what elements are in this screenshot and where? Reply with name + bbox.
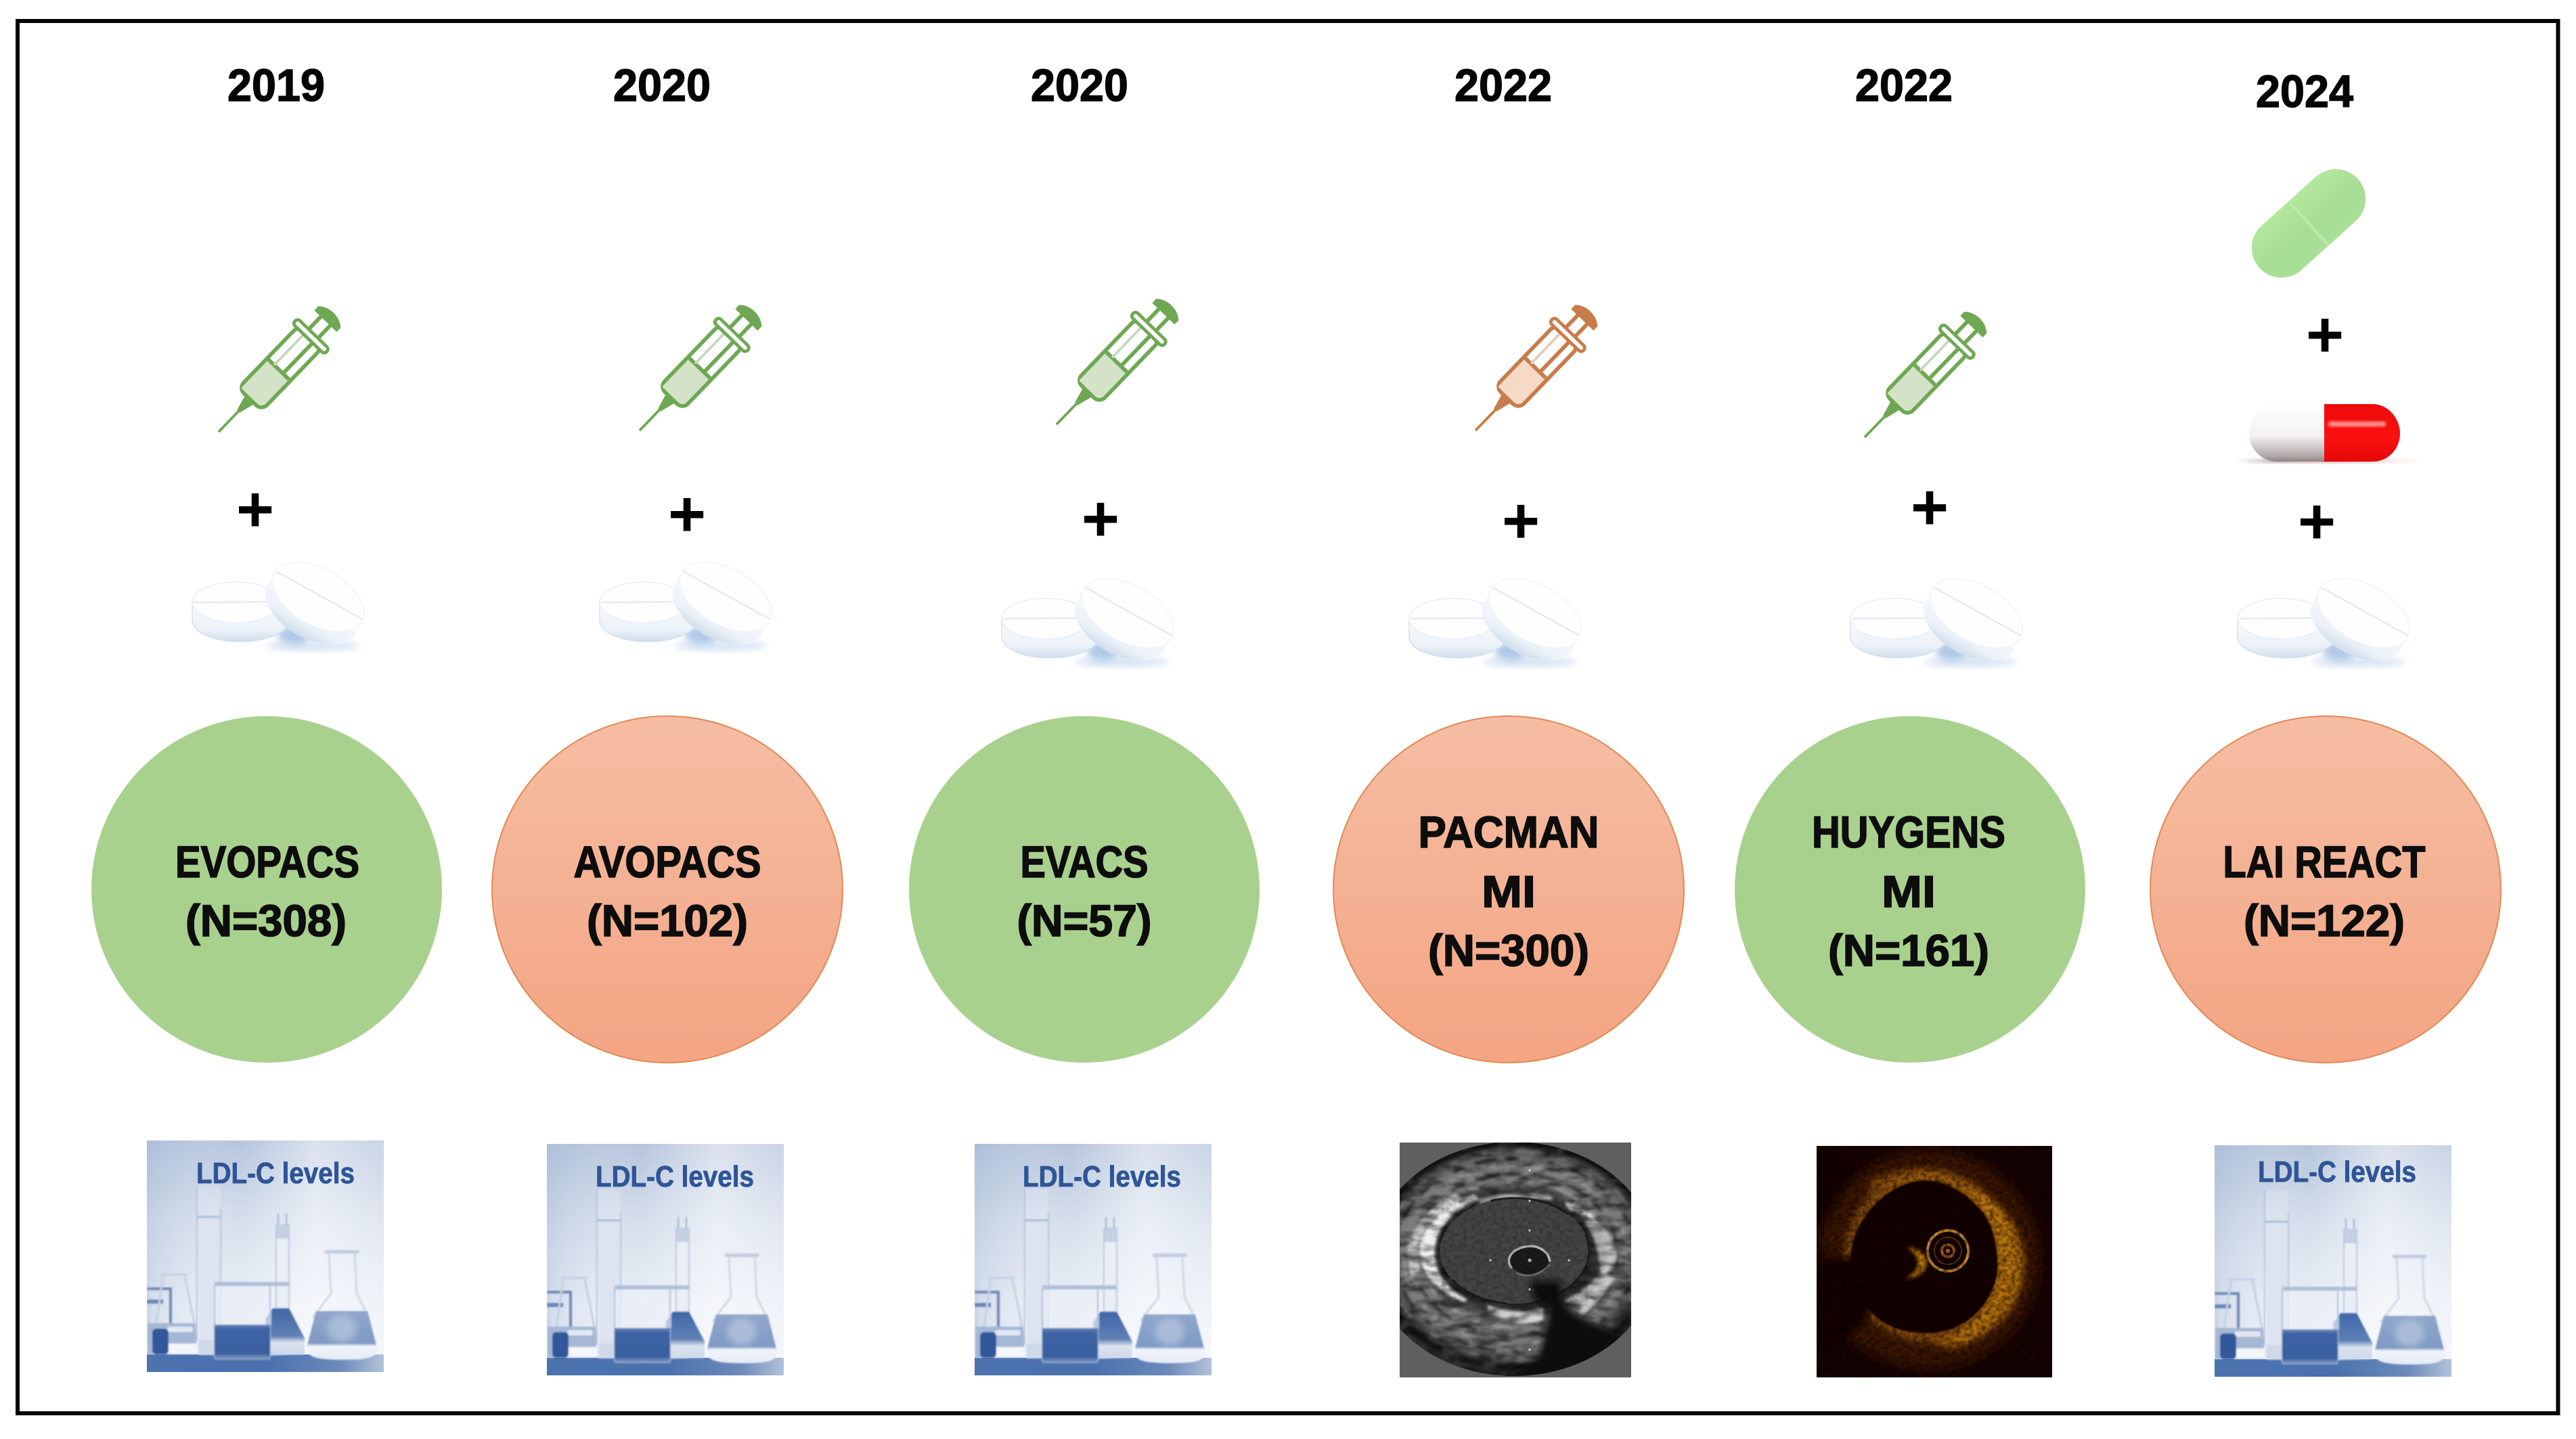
plus sign: + [668, 478, 706, 550]
icon: green capsule [2240, 157, 2378, 290]
image: lab glassware with LDL-C levels: LDL-C levels [2258, 1155, 2416, 1189]
trial label: AVOPACS [574, 837, 761, 946]
trial label: PACMAN MI [1419, 807, 1599, 975]
trial circle: AVOPACS [492, 716, 843, 1063]
plus sign: + [236, 473, 274, 546]
plus sign: + [1911, 471, 1949, 544]
icon: syringe [1849, 303, 1995, 453]
trial circle: PACMAN MI [1333, 716, 1684, 1063]
image: lab glassware with LDL-C levels [147, 1141, 384, 1372]
icon: tablets [1002, 564, 1185, 676]
trial label: PACMAN MI: (N=300) [1428, 925, 1589, 975]
trial label: EVOPACS [175, 837, 359, 946]
column: HUYGENS MI 2022 [1735, 60, 2085, 1377]
trial label: HUYGENS MI: (N=161) [1828, 925, 1989, 975]
year 2019: 2019 [227, 60, 325, 111]
trial label: EVOPACS: EVOPACS [175, 837, 359, 887]
column: AVOPACS 2020 [492, 60, 843, 1375]
year 2022: 2022 [1454, 60, 1552, 111]
trial label: EVACS: EVACS [1021, 837, 1148, 887]
trial label: LAI REACT: LAI REACT [2223, 837, 2426, 887]
icon: tablets [192, 548, 376, 659]
image: lab glassware with LDL-C levels: LDL-C levels [196, 1157, 355, 1190]
image: lab glassware with LDL-C levels [547, 1144, 784, 1375]
trial label: HUYGENS MI: HUYGENS [1812, 807, 2005, 857]
icon: tablets [600, 548, 783, 659]
trial label: LAI REACT: (N=122) [2244, 895, 2405, 946]
column: LAI REACT 2024 [2150, 66, 2501, 1377]
icon: tablets [1409, 564, 1593, 676]
column: PACMAN MI 2022 [1333, 60, 1684, 1379]
icon: syringe [1041, 290, 1187, 440]
trial label: LAI REACT [2223, 837, 2426, 946]
trial label: AVOPACS: AVOPACS [574, 837, 761, 887]
plus sign: + [1502, 485, 1540, 557]
trial label: PACMAN MI: PACMAN [1419, 807, 1599, 857]
trial label: HUYGENS MI [1812, 807, 2005, 975]
image: lab glassware with LDL-C levels: LDL-C levels [596, 1160, 754, 1193]
image: lab glassware with LDL-C levels [975, 1144, 1212, 1375]
trial circle: HUYGENS MI [1735, 716, 2085, 1063]
trial circle: EVOPACS [91, 716, 442, 1063]
column: EVOPACS 2019 [91, 60, 442, 1372]
icon: tablets [2238, 564, 2421, 676]
trial label: EVACS [1017, 837, 1152, 946]
year 2020: 2020 [1031, 60, 1128, 111]
trial label: HUYGENS MI: MI [1882, 866, 1936, 916]
trial circle: LAI REACT [2150, 716, 2501, 1063]
plus sign: + [2298, 485, 2336, 558]
icon: syringe [1460, 296, 1606, 446]
image: intravascular ultrasound [1376, 1143, 1653, 1379]
year 2020: 2020 [613, 60, 711, 111]
icon: red and white capsule [2237, 404, 2420, 463]
trial circle: EVACS [909, 716, 1260, 1063]
icon: syringe [624, 296, 770, 446]
trial label: PACMAN MI: MI [1482, 866, 1536, 916]
year 2022: 2022 [1855, 60, 1953, 111]
trial label: EVACS: (N=57) [1017, 895, 1152, 946]
trial label: AVOPACS: (N=102) [587, 895, 748, 946]
icon: tablets [1850, 564, 2034, 676]
image: lab glassware with LDL-C levels [2215, 1145, 2451, 1377]
year 2024: 2024 [2256, 66, 2353, 117]
image: optical coherence tomography [1817, 1146, 2052, 1377]
plus sign: + [2306, 298, 2344, 371]
image: lab glassware with LDL-C levels: LDL-C levels [1023, 1160, 1181, 1193]
column: EVACS 2020 [909, 60, 1260, 1375]
icon: syringe [203, 298, 349, 447]
trial label: EVOPACS: (N=308) [185, 895, 347, 946]
plus sign: + [1082, 483, 1119, 555]
